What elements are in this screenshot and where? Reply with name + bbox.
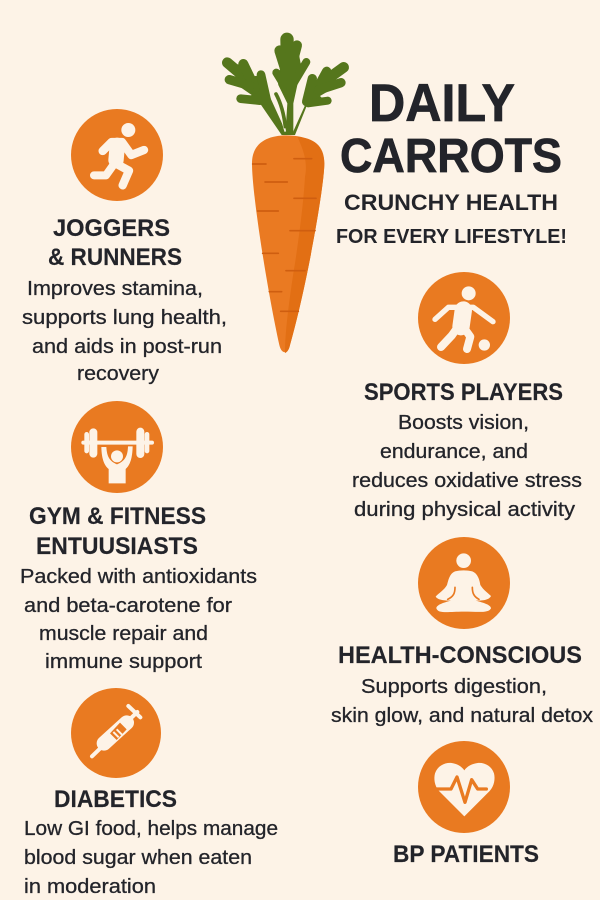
heading: gym and fitness enthusiasts: GYM & FITNESS	[29, 503, 206, 530]
illustration: carrot	[227, 39, 344, 353]
text: health-conscious benefit	[331, 675, 594, 727]
text: gym benefit: and beta-carotene for	[24, 594, 232, 617]
panel: joggers and runners	[22, 109, 227, 385]
text: sports benefit: Boosts vision,	[398, 411, 529, 434]
icon: weightlifter	[71, 401, 163, 493]
heading: sports players: SPORTS PLAYERS	[364, 379, 563, 406]
text: gym benefit: muscle repair and	[39, 622, 208, 645]
icon: soccer player	[418, 272, 510, 364]
heading: joggers and runners	[48, 215, 182, 271]
text: sports benefit: reduces oxidative stress	[352, 469, 582, 492]
title	[340, 74, 562, 183]
text: sports benefit: during physical activity	[354, 498, 576, 521]
heading: bp patients: BP PATIENTS	[393, 841, 539, 868]
text: sports benefit: endurance, and	[380, 440, 528, 463]
heading: gym and fitness enthusiasts	[29, 503, 206, 560]
text: joggers benefit: and aids in post-run	[32, 335, 222, 358]
text: joggers benefit: recovery	[77, 362, 160, 385]
text: diabetics benefit	[24, 817, 278, 898]
heading: joggers and runners: & RUNNERS	[48, 244, 182, 271]
panel: diabetics	[24, 688, 278, 898]
heading: joggers and runners: JOGGERS	[53, 215, 170, 242]
subtitle	[336, 190, 567, 248]
text: gym benefit: immune support	[45, 650, 202, 673]
title: CARROTS	[340, 130, 562, 183]
text: gym benefit: Packed with antioxidants	[20, 565, 257, 588]
text: health-conscious benefit: skin glow, and natural detox	[331, 704, 594, 727]
text: joggers benefit: supports lung health,	[22, 306, 227, 329]
text: joggers benefit: Improves stamina,	[27, 277, 203, 300]
text: diabetics benefit: Low GI food, helps manage	[24, 817, 278, 840]
text: health-conscious benefit: Supports digestion,	[361, 675, 547, 698]
text: diabetics benefit: blood sugar when eaten	[24, 846, 252, 869]
heading: health-conscious: HEALTH-CONSCIOUS	[338, 642, 582, 669]
panel: bp patients	[393, 741, 539, 868]
icon: meditating figure	[418, 537, 510, 629]
text: gym benefit	[20, 565, 257, 673]
heading: gym and fitness enthusiasts: ENTUUSIASTS	[36, 533, 198, 560]
icon: syringe	[71, 688, 161, 778]
panel: health-conscious	[331, 537, 594, 727]
text: joggers benefit	[22, 277, 227, 385]
text: sports benefit	[352, 411, 582, 521]
title: DAILY	[369, 74, 515, 133]
text: diabetics benefit: in moderation	[24, 875, 156, 898]
subtitle: CRUNCHY HEALTH	[344, 190, 558, 215]
panel: gym and fitness enthusiasts	[20, 401, 257, 673]
panel: sports players	[352, 272, 582, 521]
icon: heart with pulse	[418, 741, 510, 833]
heading: diabetics: DIABETICS	[54, 786, 177, 813]
subtitle: FOR EVERY LIFESTYLE!	[336, 225, 567, 248]
icon: runner	[71, 109, 163, 201]
